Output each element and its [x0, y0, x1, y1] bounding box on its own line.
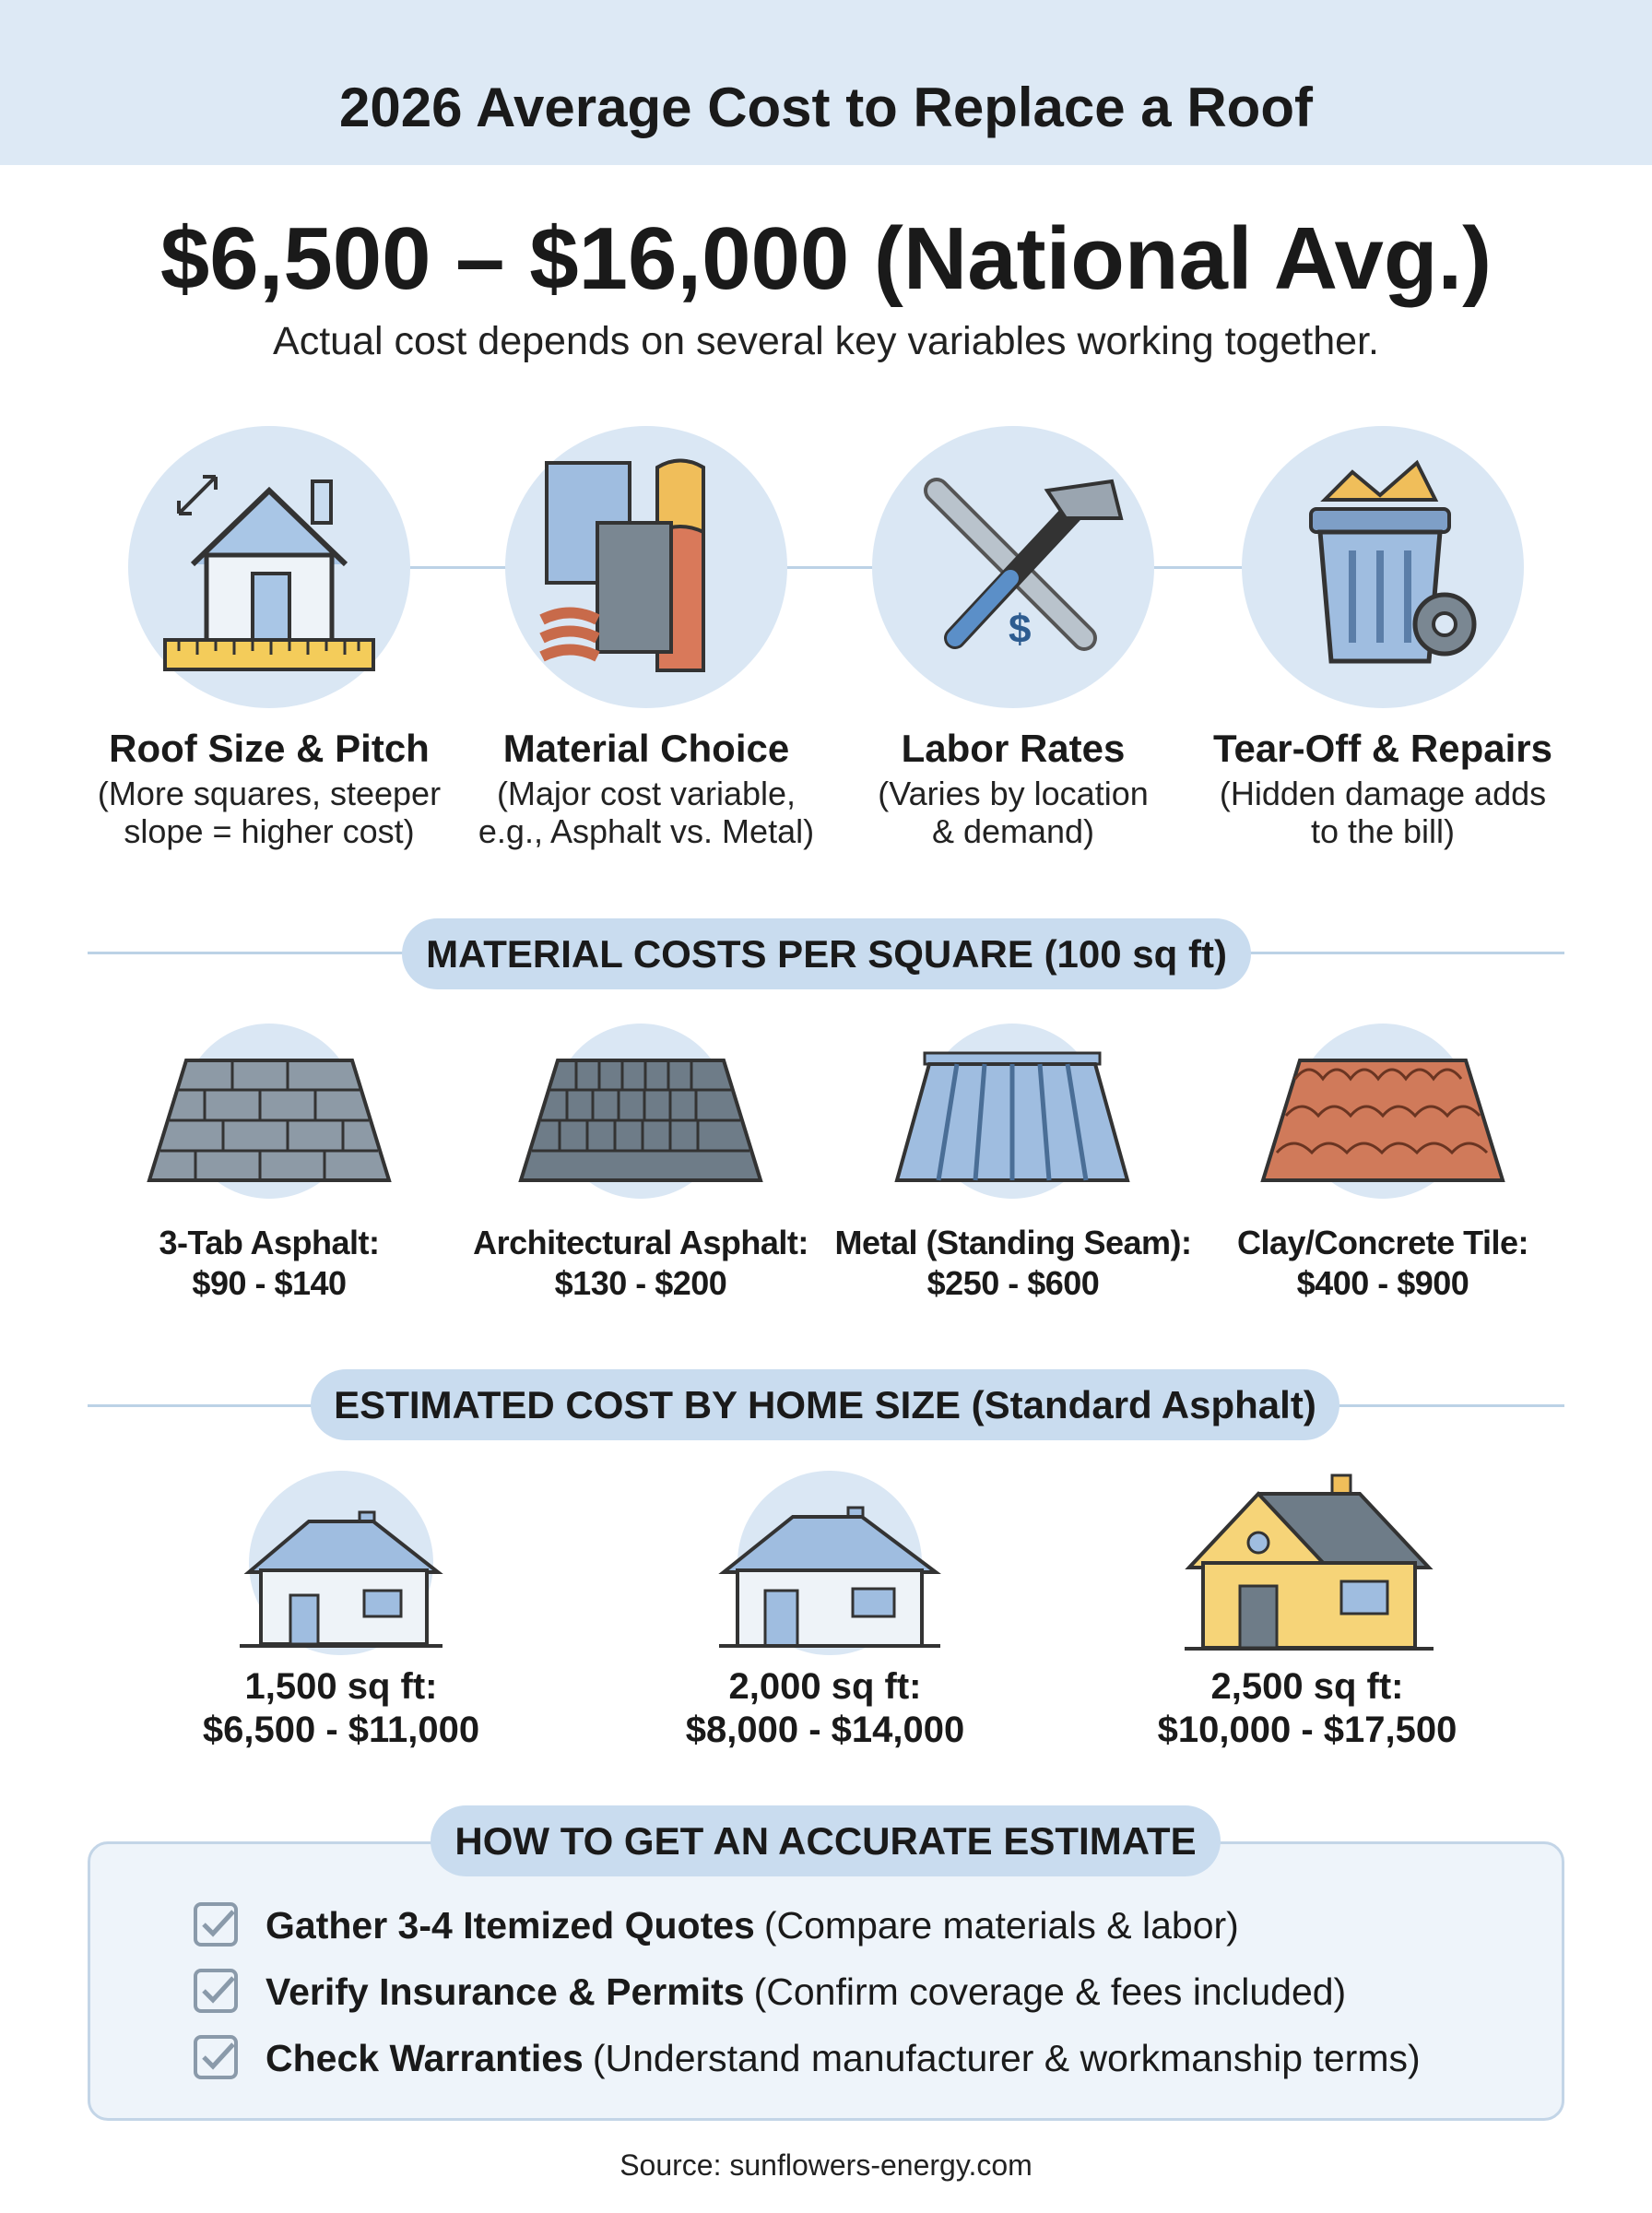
checklist: [194, 1902, 1421, 2079]
source: Source: sunflowers-energy.com: [620, 2148, 1032, 2182]
home label: 2000: 2,000 sq ft:: [729, 1666, 921, 1707]
section divider 1: [88, 952, 1564, 954]
item 2: (Confirm coverage & fees included): [754, 1970, 1346, 2012]
item 3: (Understand manufacturer & workmanship terms): [593, 2036, 1421, 2078]
material label: tile: [1237, 1224, 1528, 1302]
icon: materials: [505, 426, 787, 708]
factor label: roof size: [98, 727, 441, 850]
material label: metal: Metal (Standing Seam):: [834, 1224, 1192, 1261]
header band: [0, 0, 1652, 165]
factor label: material: [478, 727, 814, 850]
home label: 1500: 1,500 sq ft:: [245, 1666, 437, 1707]
section heading: material costs: MATERIAL COSTS PER SQUARE (100 sq ft): [426, 932, 1227, 976]
panel: accurate estimate: [88, 1841, 1564, 2121]
icon: large house: [1185, 1473, 1434, 1651]
home label: 2000: [686, 1666, 964, 1750]
home label: 1500: $6,500 - $11,000: [203, 1710, 479, 1750]
item 2: Verify Insurance & Permits: [266, 1970, 745, 2012]
home label: 2500: 2,500 sq ft:: [1211, 1666, 1403, 1707]
material label: metal: $250 - $600: [927, 1264, 1099, 1302]
icon: medium house: [718, 1471, 941, 1655]
material label: 3-tab: 3-Tab Asphalt:: [159, 1224, 380, 1261]
section heading: estimate: [431, 1805, 1221, 1876]
connector line between factor icons: [269, 566, 1383, 569]
factor label: tear-off: to the bill): [1311, 812, 1455, 850]
factor label: material: e.g., Asphalt vs. Metal): [478, 812, 814, 850]
icon: metal roof: [894, 1024, 1130, 1199]
material label: architectural: $130 - $200: [555, 1264, 726, 1302]
item 1: (Compare materials & labor): [764, 1903, 1239, 1946]
factor label: material: Material Choice: [503, 727, 789, 770]
material label: tile: Clay/Concrete Tile:: [1237, 1224, 1528, 1261]
material label: metal: [834, 1224, 1192, 1302]
factor label: tear-off: Tear-Off & Repairs: [1213, 727, 1552, 770]
item 1: [194, 1902, 1239, 1947]
headline price: $6,500 – $16,000 (National Avg.): [160, 209, 1492, 308]
factor label: material: (Major cost variable,: [497, 775, 796, 812]
factor label: tear-off: [1213, 727, 1552, 850]
icon: roof size: [128, 426, 410, 708]
home label: 2500: $10,000 - $17,500: [1158, 1710, 1457, 1750]
material label: tile: $400 - $900: [1297, 1264, 1469, 1302]
material label: 3-tab: $90 - $140: [192, 1264, 347, 1302]
home label: 2500: [1158, 1666, 1457, 1750]
factor label: roof size: (More squares, steeper: [98, 775, 441, 812]
material label: 3-tab: [159, 1224, 380, 1302]
section heading: estimate: HOW TO GET AN ACCURATE ESTIMATE: [454, 1819, 1197, 1863]
home label: 2000: $8,000 - $14,000: [686, 1710, 964, 1750]
icon: 3-tab shingles: [147, 1024, 392, 1199]
factor label: tear-off: (Hidden damage adds: [1220, 775, 1546, 812]
item 2: [194, 1969, 1346, 2013]
item 1: Gather 3-4 Itemized Quotes: [266, 1903, 755, 1946]
icon: labor tools: $: [1009, 607, 1031, 652]
icon: small house: [240, 1471, 443, 1655]
icon: clay tile: [1260, 1024, 1505, 1199]
factor label: roof size: slope = higher cost): [124, 812, 415, 850]
material label: architectural: [473, 1224, 808, 1302]
factor label: labor: Labor Rates: [902, 727, 1125, 770]
icon: architectural shingles: [518, 1024, 763, 1199]
title: 2026 Average Cost to Replace a Roof: [339, 77, 1313, 138]
section heading: material costs: [402, 918, 1251, 989]
icon: tear-off trash: [1242, 426, 1524, 708]
item 3: [194, 2035, 1421, 2079]
section divider 2: [88, 1404, 1564, 1407]
factor label: labor: & demand): [932, 812, 1094, 850]
factor label: labor: (Varies by location: [878, 775, 1149, 812]
home label: 1500: [203, 1666, 479, 1750]
icon: labor tools: [872, 426, 1154, 708]
section heading: home size: ESTIMATED COST BY HOME SIZE (Standard Asphalt): [334, 1383, 1316, 1426]
factor label: labor: [878, 727, 1149, 850]
item 3: Check Warranties: [266, 2036, 584, 2078]
section heading: home size: [311, 1369, 1339, 1440]
material label: architectural: Architectural Asphalt:: [473, 1224, 808, 1261]
factor label: roof size: Roof Size & Pitch: [109, 727, 430, 770]
subtitle: Actual cost depends on several key variables working together.: [273, 319, 1379, 363]
